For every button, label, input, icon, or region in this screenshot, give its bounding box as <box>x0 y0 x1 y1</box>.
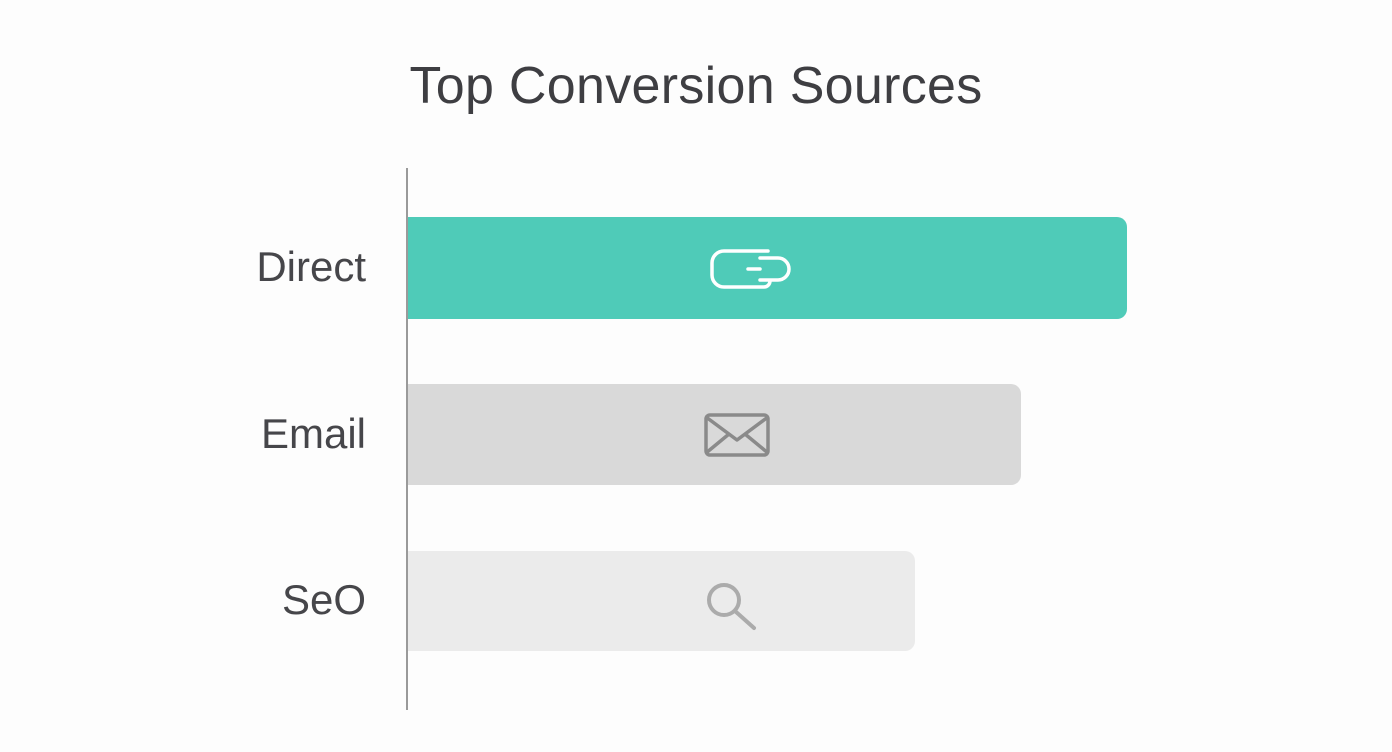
icon: direct plug <box>710 249 791 289</box>
label: Direct: Direct <box>256 243 366 290</box>
bar: SEO <box>408 551 915 651</box>
icon: envelope <box>704 413 770 457</box>
bar: Direct <box>408 217 1127 319</box>
title: Top Conversion Sources <box>409 57 983 115</box>
label: Email: Email <box>261 410 366 457</box>
label: SeO: SeO <box>282 576 366 623</box>
icon: search <box>707 583 756 630</box>
bar: Email <box>408 384 1021 485</box>
axis line <box>406 168 408 710</box>
